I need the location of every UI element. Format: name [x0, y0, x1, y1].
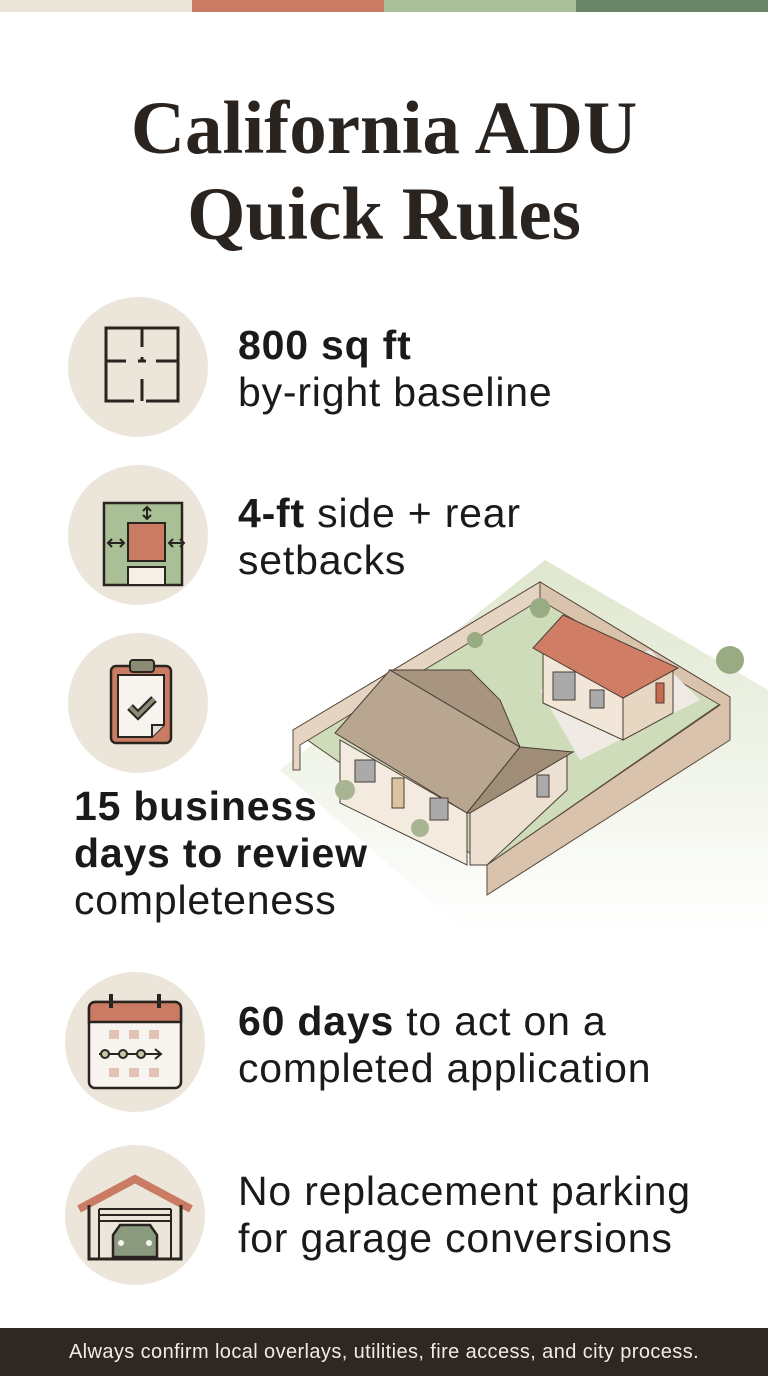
item 4: calendar icon	[65, 972, 205, 1112]
text 4: completed application	[238, 1045, 651, 1091]
illustration: house and ADU on lot	[280, 560, 768, 896]
text 1: by-right baseline	[238, 369, 552, 415]
title: Quick Rules	[187, 173, 581, 256]
title	[131, 87, 637, 256]
footer bar	[0, 1328, 768, 1376]
text 2: setbacks	[238, 537, 406, 583]
item 2: setback icon	[68, 465, 208, 605]
text 2: 4-ft side + rear	[238, 490, 521, 536]
item 5: garage icon	[65, 1145, 205, 1285]
text 4	[238, 998, 651, 1091]
text 1	[238, 322, 552, 415]
text 3: days to review	[74, 830, 368, 876]
footer bar: Always confirm local overlays, utilities, fire access, and city process.	[69, 1341, 699, 1363]
text 3	[74, 783, 368, 923]
text 5: for garage conversions	[238, 1215, 673, 1261]
text 2	[238, 490, 521, 583]
item 1: floor plan icon	[68, 297, 208, 437]
text 4: 60 days to act on a	[238, 998, 607, 1044]
title: California ADU	[131, 87, 637, 170]
text 5	[238, 1168, 691, 1261]
text 3: 15 business	[74, 783, 318, 829]
main house	[340, 740, 467, 865]
text 3: completeness	[74, 877, 337, 923]
top color stripe	[0, 0, 768, 12]
ADU	[543, 653, 623, 740]
item 3: clipboard icon	[68, 633, 208, 773]
text 1: 800 sq ft	[238, 322, 412, 368]
text 5: No replacement parking	[238, 1168, 691, 1214]
